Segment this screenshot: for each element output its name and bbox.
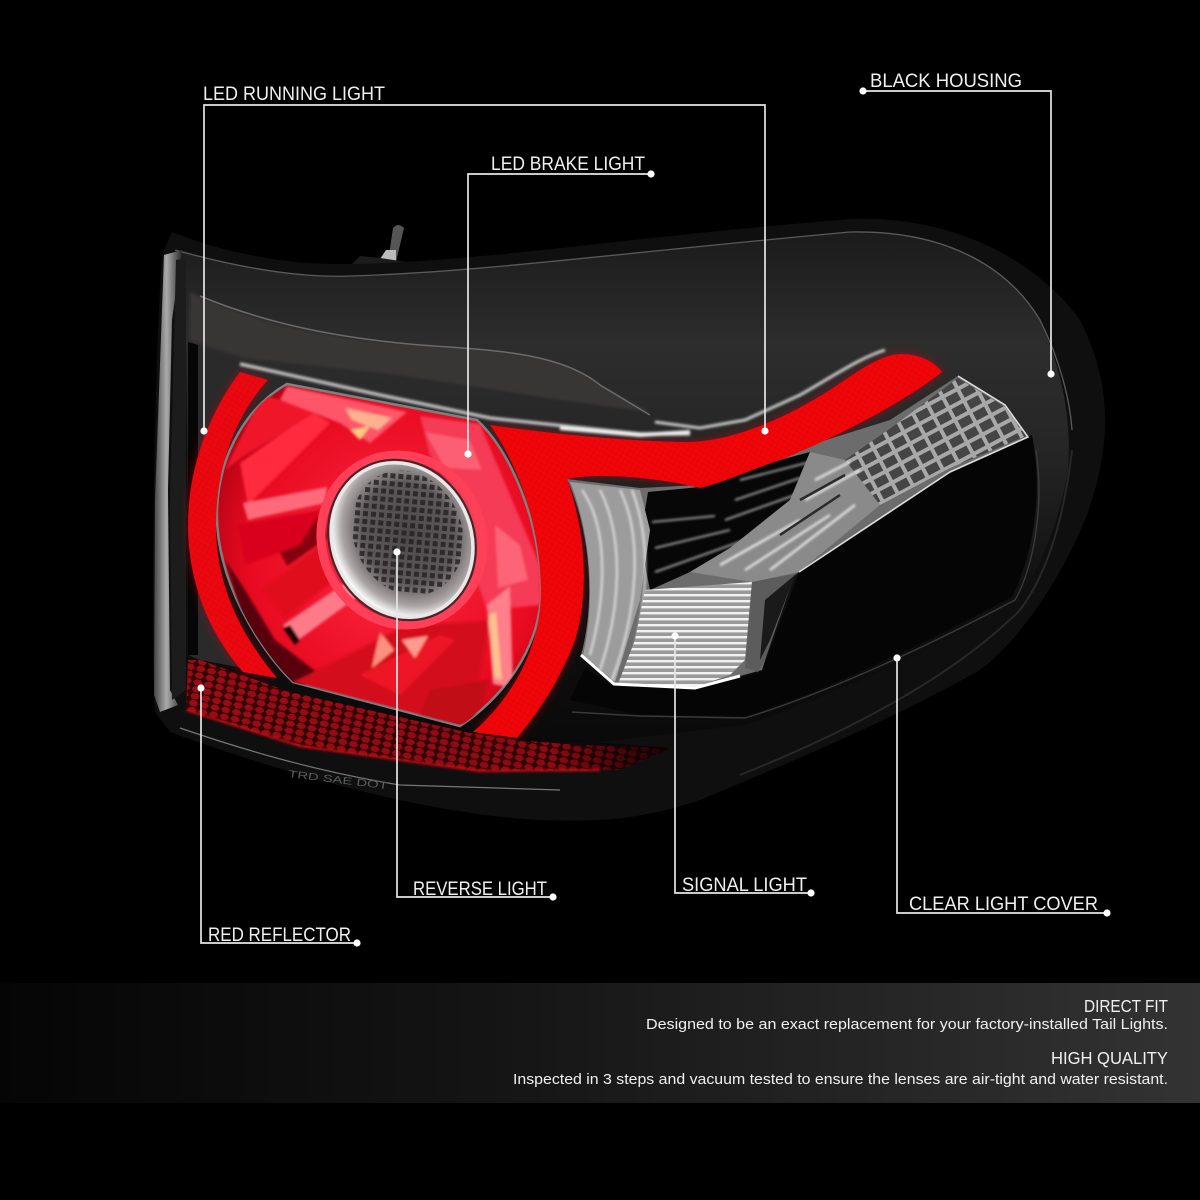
center lens	[217, 384, 541, 726]
text: direct fit description: Designed to be an exact replacement for your factory-installed Tail Lights.	[646, 1017, 1168, 1033]
red reflector	[186, 660, 672, 771]
reverse light lens	[302, 435, 502, 645]
housing face	[180, 232, 1069, 742]
signal: horizontal stripes	[618, 582, 752, 687]
fins: right pink ring	[420, 416, 541, 610]
fins: lower blades	[293, 586, 513, 726]
signal: lower flare	[745, 574, 795, 672]
callout: red reflector: RED REFLECTOR	[208, 925, 351, 946]
fins: dark shadow edge	[225, 560, 320, 690]
callout: reverse light: REVERSE LIGHT	[413, 879, 547, 900]
chrome trim above lens	[240, 350, 885, 435]
housing outer rim	[153, 219, 1105, 821]
callout: signal light: SIGNAL LIGHT	[682, 875, 807, 896]
callout: clear light cover	[893, 654, 1111, 917]
upper moulded band highlight	[190, 292, 650, 412]
rim highlights	[175, 232, 1072, 430]
callout: black housing	[859, 71, 1055, 378]
signal: left curved ribs	[570, 482, 650, 682]
callout: reverse light	[393, 548, 557, 901]
signal: upper grid cells	[845, 378, 1026, 505]
icon: wiring stud	[352, 225, 420, 264]
left recess	[188, 342, 243, 668]
lower moulding with stamped text	[180, 728, 560, 792]
left chrome strip	[154, 250, 182, 712]
tail light assembly	[153, 219, 1105, 821]
callout: red reflector	[197, 684, 361, 947]
fins: top highlight	[280, 386, 407, 443]
heading: high quality: HIGH QUALITY	[1051, 1048, 1168, 1068]
callout: signal light	[671, 632, 815, 897]
LED ring left	[188, 372, 277, 678]
callout: LED running light: LED RUNNING LIGHT	[203, 84, 385, 105]
callout: black housing: BLACK HOUSING	[870, 71, 1022, 92]
callout: LED brake light	[464, 154, 655, 458]
LED ring right and upper bar	[473, 354, 942, 738]
signal: dark reflector bands	[640, 452, 810, 590]
callout: LED running light	[200, 84, 769, 435]
lower right black panel	[570, 435, 1037, 716]
text: high quality description: Inspected in 3 steps and vacuum tested to ensure the lenses are air-tight and water resistant.	[513, 1072, 1168, 1088]
lower trim line	[572, 450, 1039, 718]
panel: features band	[0, 983, 1200, 1103]
reverse light collar	[293, 428, 511, 652]
heading: direct fit: DIRECT FIT	[1084, 996, 1168, 1016]
fins: left red blades	[225, 395, 357, 645]
clear signal lens	[567, 376, 1028, 688]
signal: streaked mid section	[690, 452, 880, 582]
lower moulding with stamped text: TRD SAE DOT	[288, 769, 388, 792]
callout: LED brake light: LED BRAKE LIGHT	[491, 154, 645, 175]
signal: highlights	[581, 655, 740, 688]
callout: clear light cover: CLEAR LIGHT COVER	[909, 894, 1098, 915]
red glow behind rings	[188, 354, 942, 738]
